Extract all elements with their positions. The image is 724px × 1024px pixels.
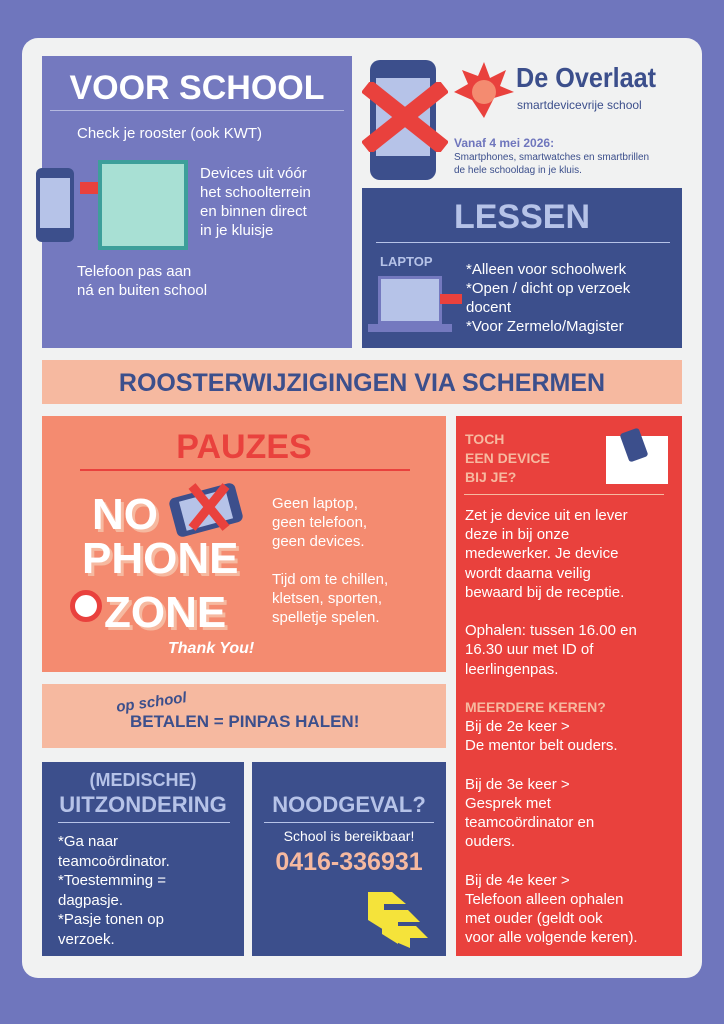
text: toch body: De mentor belt ouders. <box>465 737 618 754</box>
text: pauzes: Tijd om te chillen, <box>272 571 388 588</box>
text: uitzondering: *Ga naar <box>58 833 118 850</box>
heading: noodgeval: NOODGEVAL? <box>272 792 426 817</box>
heading: uitzondering: (MEDISCHE) <box>90 770 196 790</box>
text: lessen list: *Alleen voor schoolwerk <box>466 261 626 278</box>
icon: envelope <box>606 436 668 484</box>
panel: voor school <box>42 56 352 348</box>
text: bereikbaar: School is bereikbaar! <box>284 828 414 844</box>
panel: betalen: op school <box>115 689 188 716</box>
text: devices uit: Devices uit vóór <box>200 165 307 182</box>
icon: yellow chevrons <box>368 892 428 948</box>
icon: no phone zone <box>70 483 254 657</box>
logo text: De Overlaat <box>516 62 656 93</box>
panel: pauzes <box>42 416 446 672</box>
text: toch body: teamcoördinator en <box>465 814 594 831</box>
text: toch body: 16.30 uur met ID of <box>465 641 593 658</box>
heading: pauzes: PAUZES <box>176 428 312 466</box>
icon: phone <box>36 168 74 242</box>
logo area: Smartphones, smartwatches en smartbrillen <box>454 152 649 163</box>
banner: roosterwijzigingen <box>42 360 682 404</box>
text: pauzes: Geen laptop, <box>272 495 358 512</box>
heading: toch een device: EEN DEVICE <box>465 450 550 466</box>
panel: lessen <box>362 188 682 348</box>
text: toch body: Bij de 3e keer > <box>465 776 570 793</box>
text: toch body: Bij de 2e keer > <box>465 718 570 735</box>
text: telefoon pas <box>77 263 207 299</box>
text: pauzes: kletsen, sporten, <box>272 590 382 607</box>
panel: toch een device <box>456 416 682 956</box>
heading: lessen: LESSEN <box>454 198 590 236</box>
text: toch body: leerlingenpas. <box>465 661 558 678</box>
text: phone number: 0416-336931 <box>275 848 423 876</box>
text: betalen: BETALEN = PINPAS HALEN! <box>130 712 359 731</box>
text: toch body: Gesprek met <box>465 795 551 812</box>
logo area: smartdevicevrije school <box>517 98 642 112</box>
text: toch body: wordt daarna veilig <box>465 565 591 582</box>
text: uitzondering: *Toestemming = <box>58 872 166 889</box>
text: devices uit: in je kluisje <box>200 222 273 239</box>
logo area <box>362 60 656 180</box>
text: toch body: Ophalen: tussen 16.00 en <box>465 622 637 639</box>
text: pauzes: geen devices. <box>272 533 365 550</box>
text: lessen list: docent <box>466 299 511 316</box>
text: check rooster: Check je rooster (ook KWT) <box>77 125 262 142</box>
text: pauzes: geen telefoon, <box>272 514 367 531</box>
text: toch body: Telefoon alleen ophalen <box>465 891 623 908</box>
text: toch body: medewerker. Je device <box>465 545 618 562</box>
text: uitzondering: teamcoördinator. <box>58 852 170 870</box>
text: lessen list: *Voor Zermelo/Magister <box>466 318 624 335</box>
text: toch body: met ouder (geldt ook <box>465 910 603 927</box>
icon: no phone zone: Thank You! <box>168 640 254 657</box>
heading: toch een device: BIJ JE? <box>465 469 516 485</box>
heading: voor school: VOOR SCHOOL <box>69 69 325 107</box>
icon: locker door <box>98 160 188 250</box>
text: vanaf 4 mei: Vanaf 4 mei 2026: <box>454 136 554 150</box>
panel: noodgeval <box>252 762 446 956</box>
panel: medische uitzondering: UITZONDERING <box>59 792 227 817</box>
text: toch body: ouders. <box>465 833 515 850</box>
text: lessen list: *Open / dicht op verzoek <box>466 280 630 297</box>
heading: toch een device: TOCH <box>465 431 504 447</box>
text: uitzondering: *Pasje tonen op <box>58 911 164 928</box>
text: toch body: voor alle volgende keren). <box>465 929 638 946</box>
text: uitzondering: dagpasje. <box>58 892 123 908</box>
text: telefoon pas: Telefoon pas aan <box>77 263 191 280</box>
text: toch body: MEERDERE KEREN? <box>465 699 606 715</box>
text: toch body: Zet je device uit en lever <box>465 507 628 524</box>
icon: no phone zone: PHONE <box>82 534 238 583</box>
panel: betalen <box>42 684 446 748</box>
text: uitzondering <box>58 833 170 948</box>
icon: logo star <box>454 62 514 118</box>
heading: toch een device <box>465 431 550 485</box>
icon: arrow <box>80 182 102 194</box>
text: toch body <box>465 507 638 946</box>
text: devices uit: het schoolterrein <box>200 184 311 201</box>
icon: crossed phone <box>370 60 436 180</box>
text: toch body: Bij de 4e keer > <box>465 872 570 889</box>
text: pauzes: spelletje spelen. <box>272 609 380 626</box>
icon: laptop: LAPTOP <box>380 254 432 269</box>
panel: medische uitzondering <box>42 762 244 956</box>
logo area: de hele schooldag in je kluis. <box>454 165 582 176</box>
text: uitzondering: verzoek. <box>58 930 115 948</box>
text: devices uit <box>200 165 311 239</box>
text: lessen list <box>466 261 630 335</box>
icon: no phone zone: ZONE <box>104 588 226 637</box>
text: pauzes <box>272 495 388 626</box>
icon: no phone zone: NO <box>92 490 158 539</box>
text: toch body: bewaard bij de receptie. <box>465 584 624 601</box>
text: telefoon pas: ná en buiten school <box>77 282 207 299</box>
icon: laptop <box>368 254 462 332</box>
banner: roosterwijzigingen: ROOSTERWIJZIGINGEN VIA SCHERMEN <box>119 369 605 397</box>
text: toch body: deze in bij onze <box>465 526 569 543</box>
text: devices uit: en binnen direct <box>200 203 307 220</box>
